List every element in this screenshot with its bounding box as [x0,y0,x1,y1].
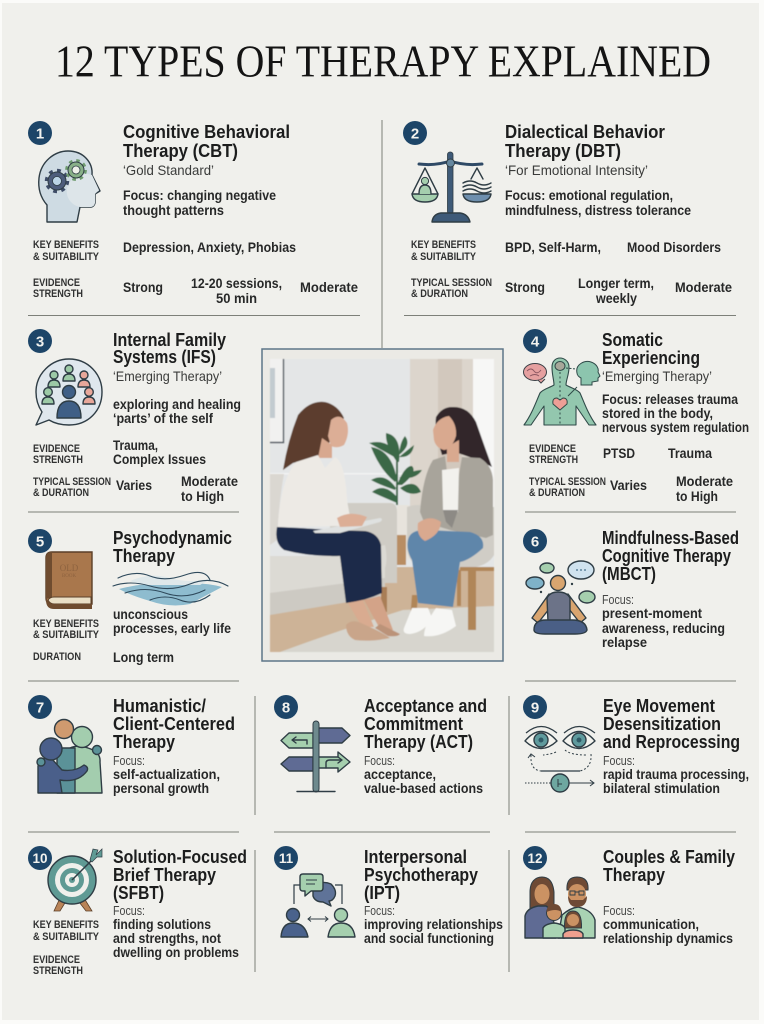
session value: Varies [116,477,152,493]
focus text: and strengths, not [113,930,221,946]
benefits value [113,437,206,467]
session value [578,275,654,306]
heading: Solution-Focused [113,847,247,867]
icon: balance scale [412,152,491,222]
focus text: stored in the body, [602,405,713,421]
label: key benefits [411,239,477,263]
number badge 6 [523,529,547,553]
label: typical session: TYPICAL SESSION [33,476,111,488]
intensity value [181,473,238,504]
focus text: and social functioning [364,930,494,946]
session value: Varies [610,477,647,493]
number badge 2 [403,121,427,145]
plant pot and table [397,505,409,560]
focus text [113,396,241,426]
icon: target with arrow [48,849,102,911]
panel: 11 Interpersonal Psychotherapy [274,846,503,946]
focus text: Focus: releases trauma [602,391,738,407]
heading: Therapy [113,546,175,566]
number badge 5 [28,529,52,553]
panel: 12 Couples and Family Therapy [523,846,735,946]
icon: two people talking [281,874,355,937]
focus label: Focus: [364,904,395,918]
icon: body with brain and heart [524,358,600,425]
label: key benefits [33,919,100,943]
heading: Couples & Family [603,847,735,867]
label: evidence strength [33,443,83,466]
heading [113,847,247,903]
label: key benefits: KEY BENEFITS [33,618,99,630]
focus text: processes, early life [113,620,231,636]
label: typical session: & DURATION [411,288,468,300]
icon: waves [113,572,228,605]
session value: weekly [595,290,637,306]
client chair [407,505,494,568]
focus text: exploring and healing [113,396,241,412]
label: evidence strength: STRENGTH [33,965,83,977]
focus text [113,916,239,960]
label: duration: DURATION [33,651,81,663]
icon: head with gears [39,151,100,222]
panel: central photo [262,349,503,661]
heading [364,696,487,752]
number badge 10: 10 [32,851,48,866]
number badge 2: 2 [411,126,419,142]
icon: old book: BOOK [62,574,76,579]
intensity value: Moderate [675,279,732,295]
session value: 50 min [216,290,257,306]
label: key benefits: & SUITABILITY [33,629,100,641]
heading: (MBCT) [602,564,656,584]
duration value: Long term [113,649,174,665]
label: key benefits: KEY BENEFITS [33,239,99,251]
heading [602,528,739,584]
focus text: awareness, reducing [602,620,725,636]
focus text [505,187,691,218]
focus text: relapse [602,634,647,650]
heading: Therapy [113,732,175,752]
heading: Psychodynamic [113,528,232,548]
client [436,407,492,467]
label: evidence strength: EVIDENCE [33,443,80,455]
intensity value: Moderate [300,279,358,295]
icon: meditating person with thought bubbles [526,561,595,634]
heading: Acceptance and [364,696,487,716]
panel: 10 Solution-Focused Brief Therapy [28,846,247,977]
panel: 6 Mindfulness-Based Cognitive Therapy [523,528,739,650]
label: key benefits: KEY BENEFITS [33,919,99,931]
label: typical session: TYPICAL SESSION [529,476,606,488]
heading: Brief Therapy [113,865,216,885]
number badge 3: 3 [36,334,44,350]
label: key benefits [33,618,100,641]
label: evidence strength [33,954,83,977]
panel: 4 Somatic Experiencing [523,329,749,504]
heading: Internal Family [113,330,226,350]
benefits value: Trauma, [113,437,158,453]
heading [113,696,235,752]
focus text: present-moment [602,605,702,621]
therapist [283,402,344,470]
label: evidence strength: STRENGTH [33,454,83,466]
subtitle: ‘Gold Standard’ [123,162,214,178]
number badge 12 [523,846,547,870]
photo: therapist and client in conversation [270,359,494,652]
benefits values: Mood Disorders [627,239,721,255]
benefits values [603,445,712,461]
focus text [123,187,276,218]
heading: Somatic [602,330,663,350]
focus text: improving relationships [364,916,503,932]
focus text [364,916,503,946]
number badge 12: 12 [527,851,543,866]
subtitle: ‘Emerging Therapy’ [602,368,712,384]
label: typical session [529,476,606,499]
heading: (SFBT) [113,883,164,903]
panel: 1 Cognitive Behavioral Therapy [28,121,358,306]
number badge 9 [523,695,547,719]
heading [505,122,665,161]
focus label: Focus: [602,593,634,607]
heading: Dialectical Behavior [505,122,665,142]
focus text: mindfulness, distress tolerance [505,202,691,218]
focus text: value-based actions [364,780,483,796]
subtitle: ‘For Emotional Intensity’ [505,162,648,178]
benefits values: PTSD [603,445,635,461]
icon: speech bubble with parts [36,359,102,425]
session value: 12-20 sessions, [191,275,282,291]
focus text [364,766,483,796]
number badge 7: 7 [36,700,44,716]
number badge 1: 1 [36,126,44,142]
panel: 3 Internal Family Systems [28,329,241,504]
session value [191,275,282,306]
heading: Client-Centered [113,714,235,734]
focus text: bilateral stimulation [603,780,720,796]
intensity value: Moderate [181,473,238,489]
label: evidence strength: STRENGTH [33,288,83,300]
number badge 8 [274,695,298,719]
number badge 1 [28,121,52,145]
panel: 7 Humanistic Therapy [28,695,235,796]
focus text: thought patterns [123,202,224,218]
heading [602,330,700,368]
label: key benefits: & SUITABILITY [33,931,100,943]
label: evidence strength: EVIDENCE [33,277,80,289]
panel: 2 Dialectical Behavior Therapy [403,121,732,306]
label: key benefits: & SUITABILITY [33,251,100,263]
focus label: Focus: [113,904,145,918]
plant [369,433,422,505]
panel: 5 Psychodynamic Therapy [28,528,232,665]
label: evidence strength [33,277,83,300]
icon: old book [46,552,92,609]
label: evidence strength: STRENGTH [529,454,578,466]
number badge 8: 8 [282,700,290,716]
heading: and Reprocessing [603,732,740,752]
heading: Desensitization [603,714,721,734]
focus text: relationship dynamics [603,930,733,946]
heading: Experiencing [602,348,700,368]
focus text: communication, [603,916,699,932]
focus text: acceptance, [364,766,436,782]
number badge 3 [28,329,52,353]
benefits values [505,239,721,255]
panel: 9 EMDR [523,695,749,796]
focus label: Focus: [364,754,395,768]
number badge 5: 5 [36,534,44,550]
heading: Psychotherapy [364,865,478,885]
heading: (IPT) [364,883,400,903]
heading [123,122,290,161]
heading: Eye Movement [603,696,715,716]
focus text: unconscious [113,606,188,622]
focus text: dwelling on problems [113,944,239,960]
number badge 7 [28,695,52,719]
subtitle: ‘Emerging Therapy’ [113,368,222,384]
heading [603,847,735,885]
label: typical session [33,476,111,499]
label: typical session: & DURATION [33,487,89,499]
heading: Interpersonal [364,847,467,867]
heading: Humanistic/ [113,696,206,716]
number badge 9: 9 [531,700,539,716]
focus text [603,916,733,946]
heading [113,528,232,566]
heading [603,696,740,752]
intensity value: to High [676,488,718,504]
focus text [113,766,220,796]
label: evidence strength: EVIDENCE [33,954,80,966]
focus label: Focus: [603,754,635,768]
number badge 6: 6 [531,534,539,550]
icon: group hug [37,720,102,793]
benefits value: Depression, Anxiety, Phobias [123,239,296,255]
focus text: Focus: emotional regulation, [505,187,673,203]
heading: Therapy (DBT) [505,141,621,161]
number badge 11: 11 [279,851,294,866]
focus text [602,605,725,650]
focus label: Focus: [603,904,635,918]
intensity value: Moderate [676,473,733,489]
focus text: finding solutions [113,916,211,932]
icon: eyes and bilateral stimulation [525,726,595,792]
label: typical session [411,277,492,300]
heading: Commitment [364,714,463,734]
benefits values: Trauma [668,445,712,461]
heading: Mindfulness-Based [602,528,739,548]
heading: Cognitive Therapy [602,546,731,566]
focus text [603,766,749,796]
number badge 10 [28,846,52,870]
focus text: self-actualization, [113,766,220,782]
panel: 8 Acceptance and Commitment Therapy [274,695,487,796]
heading: Therapy (CBT) [123,141,238,161]
heading: Cognitive Behavioral [123,122,290,142]
icon: family of four [525,877,595,938]
label: evidence strength [529,443,578,466]
focus text: ‘parts’ of the self [113,410,213,426]
focus text [113,606,231,636]
floor [270,567,494,652]
intensity value: to High [181,488,224,504]
label: typical session: TYPICAL SESSION [411,277,492,289]
number badge 4: 4 [531,334,540,350]
heading [113,330,226,367]
evidence value: Strong [505,279,545,295]
number badge 4 [523,329,547,353]
benefits values: BPD, Self-Harm, [505,239,601,255]
icon: signpost [281,721,350,792]
focus text [602,391,749,435]
label: key benefits: & SUITABILITY [411,251,477,263]
focus label: Focus: [113,754,145,768]
evidence value: Strong [123,279,163,295]
heading: Systems (IFS) [113,347,216,367]
focus text: Focus: changing negative [123,187,276,203]
session value: Longer term, [578,275,654,291]
intensity value [676,473,733,504]
focus text: personal growth [113,780,209,796]
label: evidence strength: EVIDENCE [529,443,576,455]
heading [364,847,478,903]
label: typical session: & DURATION [529,487,585,499]
heading: Therapy (ACT) [364,732,473,752]
benefits value: Complex Issues [113,451,206,467]
label: key benefits: KEY BENEFITS [411,239,476,251]
label: key benefits [33,239,100,263]
sofa [270,474,284,545]
icon: old book: OLD [60,563,79,573]
number badge 11 [274,846,298,870]
heading: Therapy [603,865,665,885]
